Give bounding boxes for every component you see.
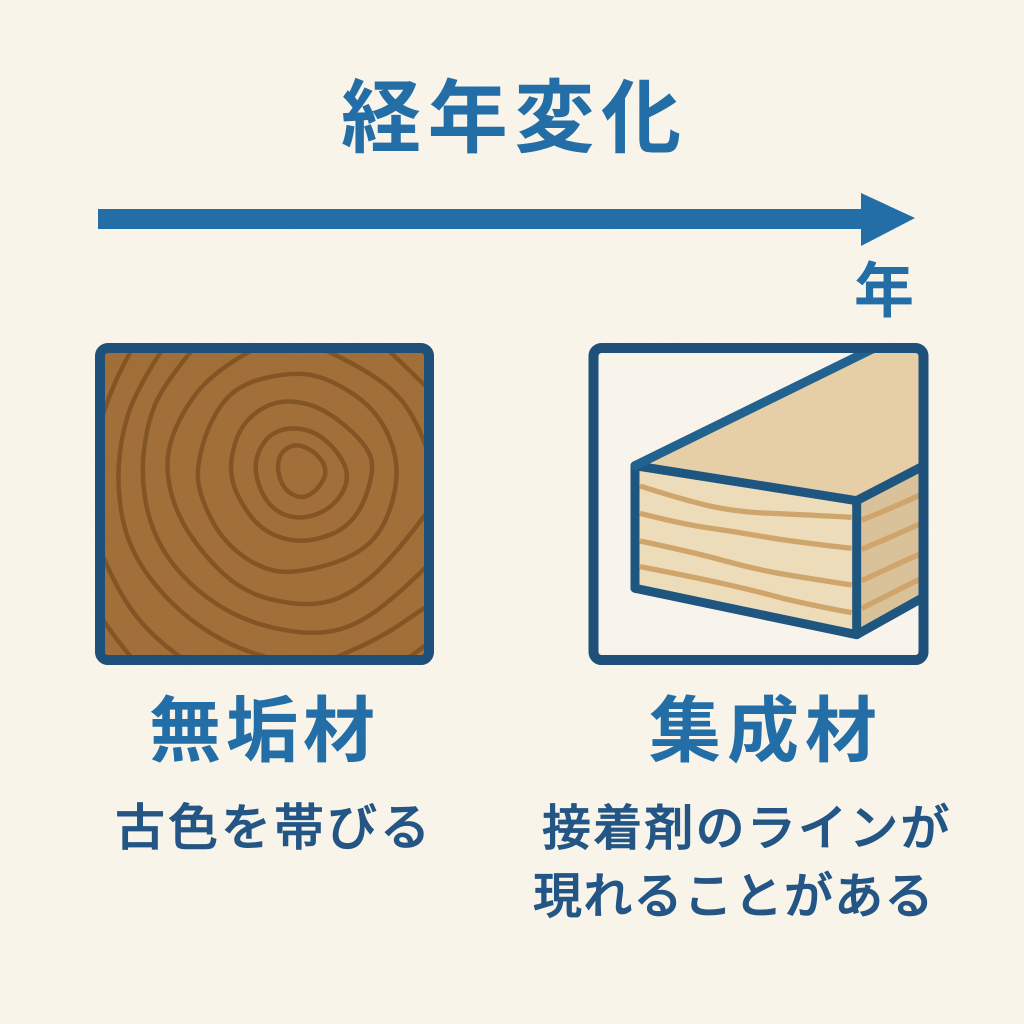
panel border	[100, 348, 429, 660]
title: 経年変化	[341, 74, 688, 163]
panel: solid wood	[96, 346, 430, 664]
arrow: time direction	[98, 193, 915, 246]
description: laminated wood: 現れることがある	[533, 870, 935, 924]
wood cross-section with growth rings	[96, 346, 430, 664]
description: laminated wood: 接着剤のラインが	[542, 802, 952, 856]
arrow label: years: 年	[854, 258, 914, 325]
panel border	[594, 348, 924, 660]
panel: laminated wood	[594, 348, 924, 660]
description: solid wood: 古色を帯びる	[115, 800, 433, 856]
description: laminated wood	[533, 802, 952, 924]
heading: laminated wood: 集成材	[649, 692, 883, 772]
heading: solid wood: 無垢材	[149, 692, 380, 772]
laminated beam illustration	[630, 353, 918, 640]
